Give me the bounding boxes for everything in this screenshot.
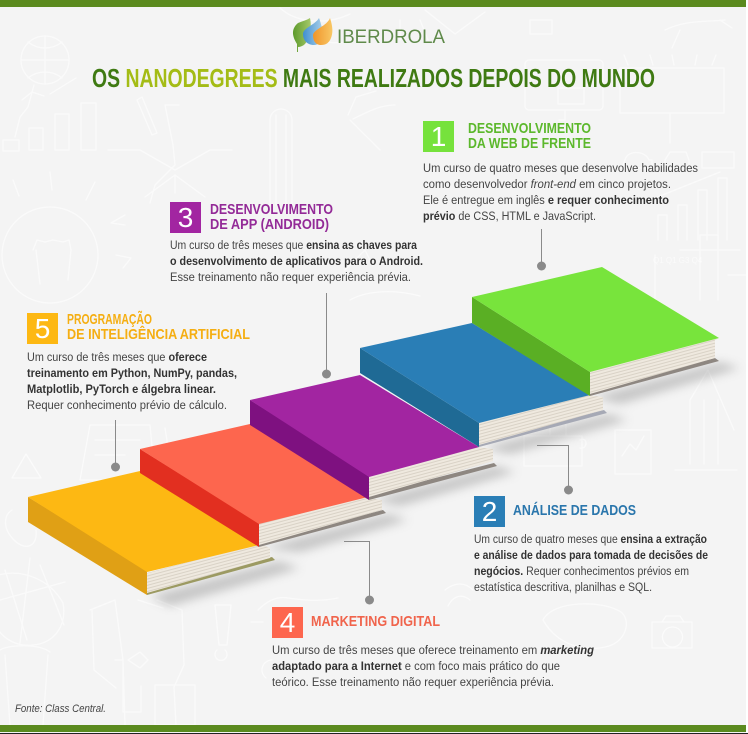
text 5: Matplotlib, PyTorch e álgebra linear.: [27, 382, 216, 396]
logo: Iberdrola: [293, 18, 445, 52]
text 2: e análise de dados para tomada de decisões de: [474, 548, 708, 562]
text 1: prévio de CSS, HTML e JavaScript.: [423, 209, 596, 223]
heading 1: DESENVOLVIMENTO: [468, 120, 591, 137]
bottom bar: [0, 725, 748, 734]
badge 5: [27, 313, 58, 344]
badge 2: [474, 496, 505, 527]
text 2: negócios. Requer conhecimentos prévios em: [474, 564, 689, 578]
text 3: Esse treinamento não requer experiência prévia.: [170, 270, 411, 284]
heading 2: ANÁLISE DE DADOS: [513, 502, 636, 519]
connector 1: [537, 229, 546, 270]
logo wordmark: IBERDROLA: [337, 26, 445, 48]
heading 1: DA WEB DE FRENTE: [468, 135, 591, 152]
text 5: treinamento em Python, NumPy, pandas,: [27, 366, 237, 380]
text 4: [272, 643, 594, 689]
text 3: Um curso de três meses que ensina as chaves para: [170, 238, 417, 252]
text 1: Ele é entregue em inglês e requer conhecimento: [423, 193, 669, 207]
text 3: o desenvolvimento de aplicativos para o Android.: [170, 254, 423, 268]
badge 4: [272, 607, 303, 638]
heading 3: DE APP (ANDROID): [210, 216, 329, 233]
section 4: [272, 607, 594, 689]
heading 3: DESENVOLVIMENTO: [210, 201, 333, 218]
badge 5: 5: [35, 313, 50, 344]
icon: blue drop: [303, 18, 322, 45]
section 1: [423, 120, 698, 223]
text 3: [170, 238, 423, 284]
badge 2: 2: [482, 496, 497, 527]
badge 1: 1: [431, 121, 446, 152]
badge 3: [170, 202, 201, 233]
text 2: Um curso de quatro meses que ensina a extração: [474, 532, 707, 546]
book 5: yellow: [28, 471, 275, 595]
book 3: purple: [250, 375, 497, 500]
section 3: [170, 201, 423, 284]
badge 3: 3: [178, 202, 193, 233]
text 4: teórico. Esse treinamento não requer experiência prévia.: [272, 675, 554, 689]
book 2: blue: [360, 323, 607, 447]
connector 3: [322, 293, 331, 378]
badge 1: [423, 121, 454, 152]
heading 4: MARKETING DIGITAL: [311, 613, 440, 630]
text 5: [27, 350, 237, 412]
connector 4: [344, 542, 374, 604]
text 4: adaptado para a Internet e com foco mais prático do que: [272, 659, 560, 673]
heading 5: DE INTELIGÊNCIA ARTIFICIAL: [67, 325, 250, 343]
text 2: [474, 532, 708, 594]
top bar: [0, 0, 748, 7]
icon: orange drop: [313, 18, 332, 45]
text 4: Um curso de três meses que oferece treinamento em marketing: [272, 643, 594, 657]
badge 4: 4: [280, 607, 295, 638]
text 2: estatística descritiva, planilhas e SQL.: [474, 580, 652, 594]
heading 1: [468, 120, 591, 152]
heading 5: [67, 310, 250, 343]
icon: leaf: [293, 18, 311, 52]
text 1: Um curso de quatro meses que desenvolve habilidades: [423, 161, 698, 175]
text 1: [423, 161, 698, 223]
connector 2: [537, 446, 573, 494]
heading 3: [210, 201, 333, 233]
book 1: green: [472, 267, 719, 396]
section 2: [474, 496, 708, 594]
right edge: [746, 0, 748, 733]
book 4: coral: [140, 424, 386, 547]
section 5: [27, 310, 250, 412]
Q labels in doodle: Q1 Q1 G3 Q4: [653, 256, 703, 265]
heading 5: PROGRAMAÇÃO: [67, 310, 152, 328]
book shadows: [150, 362, 740, 606]
connector 5: [111, 420, 120, 472]
text 1: como desenvolvedor front-end em cinco projetos.: [423, 177, 671, 191]
source note: Fonte: Class Central.: [15, 703, 106, 715]
text 5: Requer conhecimento prévio de cálculo.: [27, 398, 227, 412]
text 5: Um curso de três meses que oferece: [27, 350, 207, 364]
